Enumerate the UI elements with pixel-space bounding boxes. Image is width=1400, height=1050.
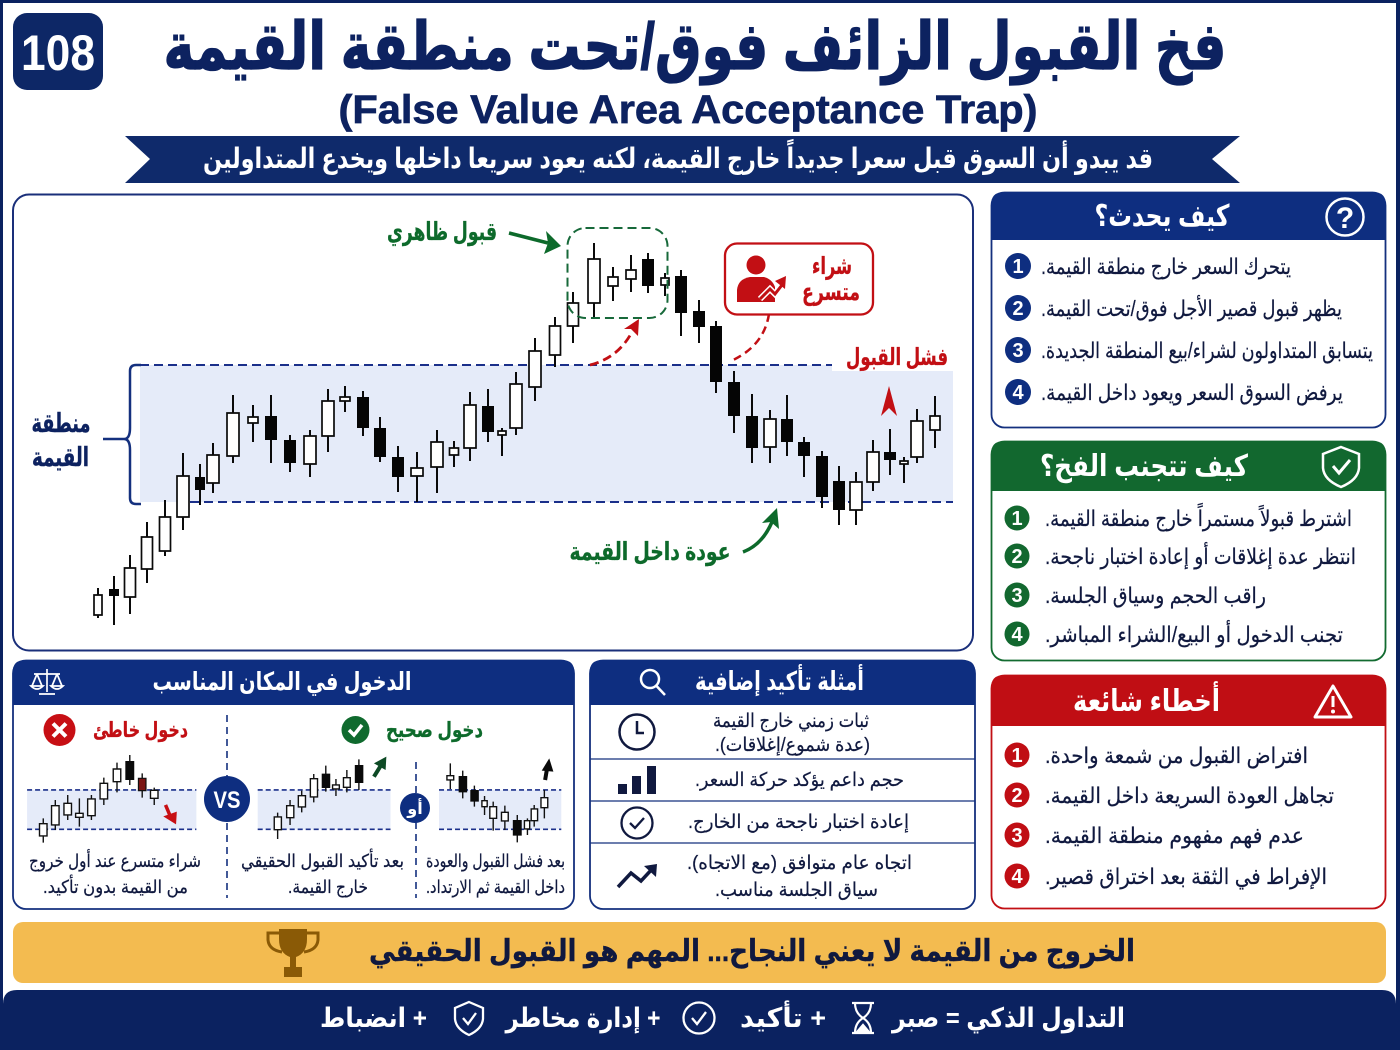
text rows: اتجاه عام متوافق (مع الاتجاه).	[687, 853, 912, 874]
caption: wrong entry: من القيمة بدون تأكيد.	[43, 874, 188, 898]
wrong entry heading: دخول خاطئ	[93, 719, 188, 742]
value area zone	[140, 365, 953, 502]
arrow: red up marker	[881, 386, 897, 416]
list: افتراض القبول من شمعة واحدة.	[1045, 743, 1308, 769]
footer: smart trading formula: التداول الذكي = صبر	[890, 1003, 1125, 1034]
header	[12, 660, 574, 705]
panel: common mistakes	[991, 675, 1386, 908]
right entry heading: دخول صحيح	[386, 719, 483, 742]
row dividers	[590, 759, 975, 843]
header	[991, 441, 1386, 491]
panel: how to avoid the trap	[991, 441, 1386, 660]
footer: smart trading formula	[3, 990, 1396, 1050]
heading: أمثلة تأكيد إضافية	[695, 664, 864, 697]
panel: how it happens	[991, 192, 1386, 428]
wrong entry heading	[44, 714, 188, 746]
dividers	[227, 715, 416, 898]
icon: warning	[1315, 686, 1351, 717]
text rows: حجم داعم يؤكد حركة السعر.	[695, 770, 904, 791]
arrow: green return	[743, 508, 779, 552]
icon: hourglass	[852, 1003, 874, 1033]
icon: shield	[1323, 447, 1359, 487]
caption: wrong entry: شراء متسرع عند أول خروج	[29, 849, 201, 872]
list: 3	[1011, 825, 1023, 847]
label: value area	[32, 408, 90, 472]
icon: clock	[620, 714, 654, 750]
callout: hasty buying: شراء	[812, 253, 852, 280]
icon: trend	[618, 864, 657, 887]
header	[991, 675, 1386, 726]
list	[1005, 253, 1373, 406]
heading: أخطاء شائعة	[1073, 681, 1220, 718]
icon: hasty buyer	[737, 256, 786, 302]
caption: after real acceptance: بعد تأكيد القبول الحقيقي	[241, 848, 404, 872]
callout: hasty buying	[725, 244, 873, 314]
text rows: (عدة شموع/إغلاقات).	[715, 735, 870, 757]
caption: after failed acceptance	[426, 851, 565, 898]
mini chart: wrong entry	[27, 755, 196, 843]
icon: volume bars	[618, 766, 656, 794]
arrow: red dashed up	[590, 319, 639, 365]
value area bracket	[103, 365, 141, 504]
icon: question	[1326, 198, 1364, 236]
ribbon: description	[125, 136, 1240, 183]
list: يرفض السوق السعر ويعود داخل القيمة.	[1041, 380, 1343, 406]
header	[590, 660, 976, 705]
list: 1	[1011, 508, 1023, 530]
arrow: to acceptance box	[509, 231, 561, 254]
panel: main candlestick chart	[13, 194, 973, 650]
list: 4	[1012, 382, 1024, 404]
banner: key message: الخروج من القيمة لا يعني النجاح... المهم هو القبول الحقيقي	[369, 935, 1135, 969]
list: 4	[1011, 866, 1023, 888]
list: تجاهل العودة السريعة داخل القيمة.	[1045, 783, 1334, 808]
icon: check	[622, 808, 652, 838]
caption: after real acceptance: خارج القيمة.	[288, 877, 368, 898]
heading: الدخول في المكان المناسب	[152, 668, 412, 697]
or badge: أو	[406, 798, 423, 818]
badge: number 108: 108	[21, 25, 95, 81]
list: عدم فهم مفهوم منطقة القيمة.	[1045, 823, 1304, 849]
callout: hasty buying: متسرع	[802, 279, 860, 306]
label: value area: القيمة	[32, 442, 89, 472]
list: الإفراط في الثقة بعد اختراق قصير.	[1045, 864, 1327, 890]
list: 1	[1011, 745, 1023, 767]
text rows: سياق الجلسة مناسب.	[715, 880, 878, 901]
list: راقب الحجم وسياق الجلسة.	[1045, 583, 1266, 609]
caption: after failed acceptance: بعد فشل القبول والعودة	[426, 851, 565, 872]
caption: after real acceptance	[241, 848, 404, 898]
heading: كيف يحدث؟	[1094, 200, 1230, 233]
caption: wrong entry	[29, 849, 201, 898]
vs badge: VS	[214, 787, 240, 814]
badge: number 108	[13, 13, 103, 90]
list: يظهر قبول قصير الأجل فوق/تحت القيمة.	[1041, 295, 1342, 321]
list: 2	[1012, 298, 1024, 320]
banner: key message	[13, 922, 1386, 983]
icon: shield	[455, 1002, 483, 1035]
mini chart: after real acceptance	[258, 757, 390, 839]
text rows: ثبات زمني خارج القيمة	[713, 711, 869, 732]
or badge	[400, 793, 430, 823]
label: value area: منطقة	[32, 408, 90, 438]
list: 1	[1012, 256, 1024, 278]
mini chart: after failed acceptance	[439, 758, 561, 842]
list: انتظر عدة إغلاقات أو إعادة اختبار ناجحة.	[1045, 542, 1356, 570]
icon: scales	[31, 669, 63, 694]
footer: smart trading formula: + انضباط	[320, 1003, 427, 1033]
ribbon: description: قد يبدو أن السوق قبل سعرا جديداً خارج القيمة، لكنه يعود سريعا داخلها ويخدع المتداولين	[203, 138, 1153, 176]
list: يتحرك السعر خارج منطقة القيمة.	[1041, 254, 1291, 280]
icon: trophy	[268, 929, 318, 977]
panel: entering at the right place	[12, 660, 574, 909]
candlesticks	[94, 243, 940, 625]
subtitle: (False Value Area Acceptance Trap)	[338, 88, 1038, 132]
label: apparent acceptance: قبول ظاهري	[387, 218, 497, 247]
right entry heading	[342, 716, 483, 744]
list: تجنب الدخول أو البيع/الشراء المباشر.	[1045, 620, 1343, 647]
list: 3	[1012, 340, 1024, 362]
icon: question: ?	[1336, 202, 1354, 235]
caption: after failed acceptance: داخل القيمة ثم الارتداد.	[426, 877, 565, 898]
apparent acceptance box	[568, 228, 668, 318]
header	[991, 192, 1386, 240]
list: 3	[1011, 585, 1023, 607]
panel: additional confirmation examples	[590, 660, 976, 909]
icon: check circle	[684, 1002, 714, 1034]
heading: كيف تتجنب الفخ؟	[1040, 450, 1248, 483]
list: 2	[1011, 785, 1023, 807]
vs badge	[204, 776, 250, 822]
arrow: callout pointer	[731, 314, 769, 361]
icon: search	[641, 670, 665, 695]
label: return inside value: عودة داخل القيمة	[570, 538, 730, 567]
text rows	[687, 711, 912, 901]
list	[1004, 742, 1334, 890]
list: 2	[1011, 546, 1023, 568]
text rows: إعادة اختبار ناجحة من الخارج.	[688, 812, 909, 834]
footer: smart trading formula: + إدارة مخاطر	[504, 1003, 660, 1034]
label: failed acceptance: فشل القبول	[846, 344, 948, 371]
list	[1004, 502, 1356, 647]
footer: smart trading formula: + تأكيد	[740, 1000, 826, 1033]
list: 4	[1011, 624, 1023, 646]
